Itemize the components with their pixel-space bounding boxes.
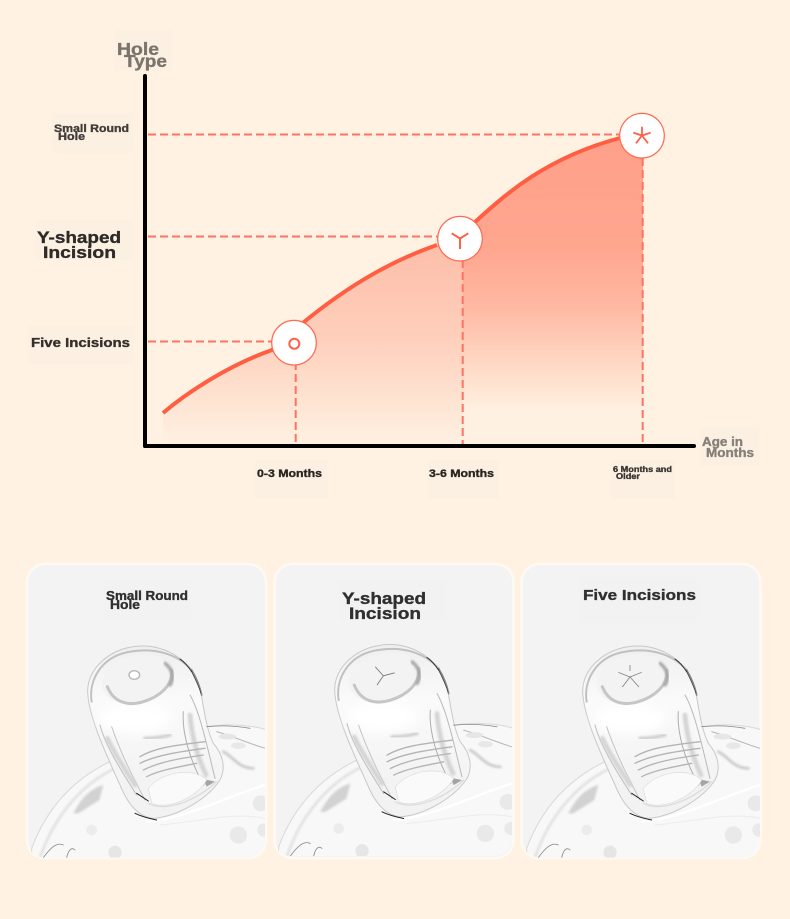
y label: Y-shaped incision bbox=[35, 220, 134, 262]
y label: Y-shaped incision: Y-shaped bbox=[37, 228, 121, 247]
y label: small round hole: Hole bbox=[58, 131, 85, 143]
line chart: hole type by age bbox=[145, 76, 694, 446]
x axis title bbox=[700, 427, 759, 466]
vertical guide lines bbox=[296, 158, 643, 444]
x axis title: Age in bbox=[702, 435, 743, 449]
y label: five incisions: Five Incisions bbox=[31, 335, 130, 350]
panel title: Y-shaped bbox=[342, 590, 426, 608]
x label: 3-6 months: 3-6 Months bbox=[429, 468, 494, 480]
area fill under curve: 0-6 months bbox=[163, 229, 463, 445]
area fill under curve: 6 months and older bbox=[463, 136, 643, 445]
x label: 6 months and older bbox=[611, 460, 675, 499]
marker: five incisions bbox=[620, 113, 664, 158]
panel title: Five Incisions bbox=[583, 587, 696, 604]
panel title: Hole bbox=[110, 597, 140, 612]
y axis title: Hole bbox=[117, 39, 159, 59]
x label: 0-3 months: 0-3 Months bbox=[257, 468, 322, 480]
panel title bbox=[103, 581, 191, 620]
y label: small round hole: Small Round bbox=[54, 123, 129, 135]
x label: 3-6 months bbox=[428, 460, 499, 499]
y label: Y-shaped incision: Incision bbox=[43, 243, 116, 262]
x label: 0-3 months bbox=[255, 460, 328, 499]
photo: nipple with Y incision bbox=[279, 644, 518, 857]
growth curve bbox=[163, 138, 620, 413]
panel: small round hole bbox=[27, 564, 271, 859]
y axis title: Type bbox=[124, 51, 167, 71]
marker: Y-shaped incision bbox=[438, 216, 482, 261]
panel: five incisions bbox=[522, 564, 766, 859]
photo: nipple with round hole bbox=[32, 646, 271, 859]
photo: nipple with five incisions bbox=[527, 646, 766, 859]
marker: round hole bbox=[272, 320, 316, 365]
panel title bbox=[339, 581, 446, 623]
x label: 6 months and older: 6 Months and bbox=[613, 465, 672, 474]
x axis title: Months bbox=[706, 446, 754, 460]
panel title: Incision bbox=[349, 605, 421, 623]
y label: five incisions bbox=[28, 326, 134, 364]
panel title bbox=[579, 578, 698, 622]
y axis title bbox=[115, 30, 172, 71]
y label: small round hole bbox=[52, 113, 133, 153]
panel title: Small Round bbox=[106, 588, 188, 603]
x axis bbox=[145, 444, 694, 448]
panel: Y-shaped incision bbox=[274, 564, 518, 858]
x label: 6 months and older: Older bbox=[616, 472, 640, 481]
y axis bbox=[143, 76, 147, 446]
horizontal guide lines bbox=[148, 134, 622, 342]
